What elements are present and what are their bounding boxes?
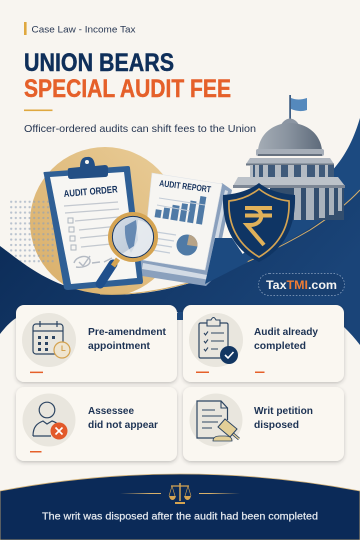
signature mark (74, 256, 112, 267)
gold curve line (100, 190, 360, 294)
shield shadow (205, 238, 248, 284)
navy wave main (0, 190, 360, 345)
clipboard (44, 157, 143, 290)
eyebrow: case law label: Case Law - Income Tax (32, 24, 136, 36)
title: UNION BEARS (24, 49, 174, 77)
hero illustration (0, 95, 360, 345)
lower columns (270, 188, 344, 220)
card text: disposed (254, 420, 299, 431)
card text: Audit already (254, 327, 318, 338)
card text: Writ petition (254, 406, 313, 417)
brand pill (258, 274, 344, 296)
report bar chart (155, 189, 206, 225)
flag (289, 95, 291, 122)
footer banner (0, 474, 360, 540)
gold circle backdrop (30, 147, 180, 297)
icon: checklist clipboard (189, 313, 243, 367)
card text: Assessee (88, 406, 134, 417)
footer text: The writ was disposed after the audit had been completed (42, 512, 318, 522)
entablature (233, 177, 345, 186)
card text: Pre-amendment (88, 327, 167, 338)
panel: writ petition disposed (183, 387, 344, 461)
building (233, 95, 345, 220)
clip (68, 157, 108, 179)
magnifying glass (100, 214, 156, 284)
report heading: AUDIT REPORT (159, 178, 212, 194)
footer divider lines (120, 492, 240, 494)
title (24, 49, 231, 103)
report stack (140, 173, 232, 286)
icon: person with cross (22, 394, 76, 446)
panel: pre-amendment appointment (16, 305, 177, 382)
shield with rupee (205, 183, 295, 284)
title: SPECIAL AUDIT FEE (24, 75, 231, 103)
card text: appointment (88, 341, 151, 352)
panel: assessee did not appear (16, 387, 177, 461)
subtitle: Officer-ordered audits can shift fees to the Union (24, 124, 256, 135)
icon: scales of justice (169, 483, 191, 503)
title divider (24, 110, 52, 111)
brand pill: TaxTMI.com (266, 278, 337, 292)
icon: document with gavel (190, 394, 242, 446)
panel: audit already completed (183, 305, 344, 382)
clipboard heading: AUDIT ORDER (63, 184, 118, 200)
icon: calendar with clock (22, 313, 76, 367)
card text: completed (254, 341, 306, 352)
report pie chart (176, 234, 198, 256)
navy wave back panel (170, 118, 360, 320)
dome (280, 118, 300, 126)
halftone dots (8, 200, 56, 264)
drum with columns (250, 165, 334, 178)
card text: did not appear (88, 420, 158, 431)
